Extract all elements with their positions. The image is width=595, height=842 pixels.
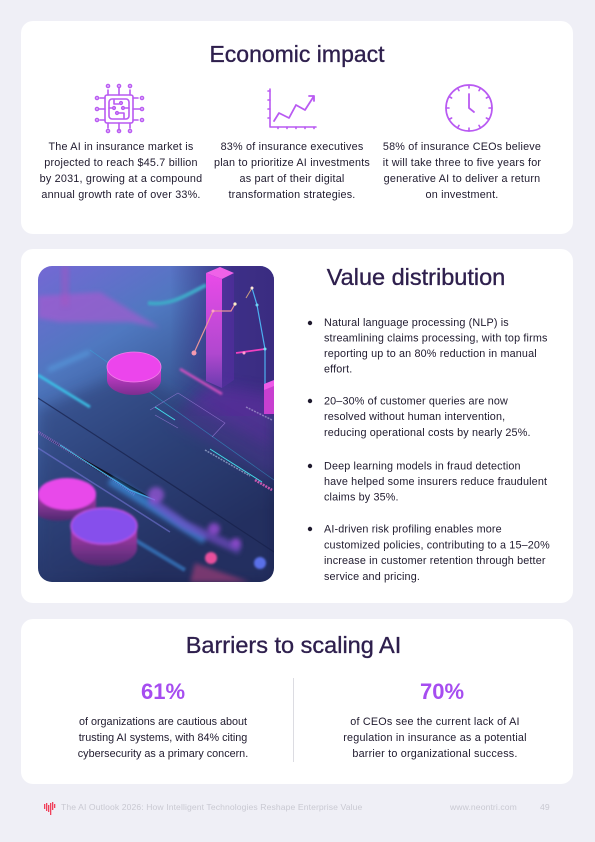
bullet: NLP: Natural language processing (NLP) is bbox=[324, 317, 509, 329]
icon: line chart bbox=[268, 89, 316, 128]
stat: 61%: cybersecurity as a primary concern. bbox=[78, 748, 248, 760]
illustration: isometric data dashboard bbox=[38, 266, 274, 582]
logo bbox=[44, 802, 55, 815]
text: CEOs: on investment. bbox=[425, 189, 499, 201]
bullet: fraud detection: claims by 35%. bbox=[324, 492, 399, 504]
text: executives: as part of their digital bbox=[239, 173, 345, 185]
bar: tall pink column bbox=[206, 267, 234, 388]
footer bbox=[44, 802, 550, 815]
bullet: risk profiling: increase in customer retention through better bbox=[324, 555, 546, 567]
bullet: NLP: streamlining claims processing, with top firms bbox=[324, 332, 548, 344]
heading: barriers: Barriers to scaling AI bbox=[186, 632, 401, 658]
text: executives: transformation strategies. bbox=[228, 189, 356, 201]
bullet list bbox=[308, 317, 550, 583]
panel: barriers to scaling AI bbox=[21, 619, 573, 784]
bullet: customer queries: resolved without human intervention, bbox=[324, 411, 505, 423]
text: market projection: projected to reach $45.7 billion bbox=[44, 157, 198, 169]
text: CEOs: it will take three to five years for bbox=[383, 157, 541, 169]
heading: value distribution: Value distribution bbox=[327, 264, 505, 290]
text: market projection: The AI in insurance market is bbox=[48, 141, 194, 153]
bullet: risk profiling: service and pricing. bbox=[324, 571, 420, 583]
icon: AI chip bbox=[96, 84, 144, 132]
stat: 61%: trusting AI systems, with 84% citing bbox=[79, 732, 247, 744]
bullet: fraud detection: have helped some insurers reduce fraudulent bbox=[324, 476, 547, 488]
bullet: NLP bbox=[308, 317, 548, 376]
bullet: fraud detection: Deep learning models in fraud detection bbox=[324, 460, 521, 472]
stat: 70%: barrier to organizational success. bbox=[352, 748, 518, 760]
bullet: customer queries: 20–30% of customer queries are now bbox=[324, 396, 508, 408]
text: market projection: by 2031, growing at a compound bbox=[40, 173, 202, 185]
text: market projection bbox=[40, 141, 202, 201]
bullet: fraud detection bbox=[308, 460, 547, 504]
bullet: NLP: reporting up to an 80% reduction in manual bbox=[324, 348, 537, 360]
cylinder: purple bbox=[71, 508, 137, 566]
cylinder: centre pink bbox=[107, 352, 161, 395]
text: CEOs bbox=[383, 141, 541, 201]
text: CEOs: 58% of insurance CEOs believe bbox=[383, 141, 541, 153]
website: www.neontri.com bbox=[449, 802, 517, 812]
stat: 61% bbox=[78, 679, 248, 760]
page number: 49 bbox=[540, 802, 550, 812]
stat: 61%: of organizations are cautious about bbox=[79, 716, 247, 728]
heading: economic impact: Economic impact bbox=[209, 41, 385, 67]
stat: 70%: 70% bbox=[420, 679, 464, 704]
bullet: risk profiling: AI-driven risk profiling enables more bbox=[324, 524, 502, 536]
text: CEOs: generative AI to deliver a return bbox=[384, 173, 540, 185]
text: executives bbox=[214, 141, 370, 201]
text: market projection: annual growth rate of over 33%. bbox=[41, 189, 201, 201]
stat: 70% bbox=[343, 679, 527, 760]
stat: 70%: regulation in insurance as a potential bbox=[343, 732, 527, 744]
stat: 70%: of CEOs see the current lack of AI bbox=[350, 716, 520, 728]
panel: economic impact bbox=[21, 21, 573, 234]
footer title: The AI Outlook 2026: How Intelligent Technologies Reshape Enterprise Value bbox=[61, 802, 362, 812]
icon: clock bbox=[446, 85, 492, 131]
bullet: NLP: effort. bbox=[324, 364, 352, 376]
bullet: customer queries: reducing operational costs by nearly 25%. bbox=[324, 427, 531, 439]
bullet: customer queries bbox=[308, 396, 531, 439]
bullet: risk profiling: customized policies, contributing to a 15–20% bbox=[324, 540, 550, 552]
stat: 61%: 61% bbox=[141, 679, 185, 704]
bullet: risk profiling bbox=[308, 524, 550, 583]
panel: value distribution bbox=[21, 249, 573, 603]
text: executives: plan to prioritize AI investments bbox=[214, 157, 370, 169]
text: executives: 83% of insurance executives bbox=[221, 141, 364, 153]
line: pink trend bbox=[192, 286, 266, 385]
cylinder: left pink bbox=[38, 478, 96, 521]
